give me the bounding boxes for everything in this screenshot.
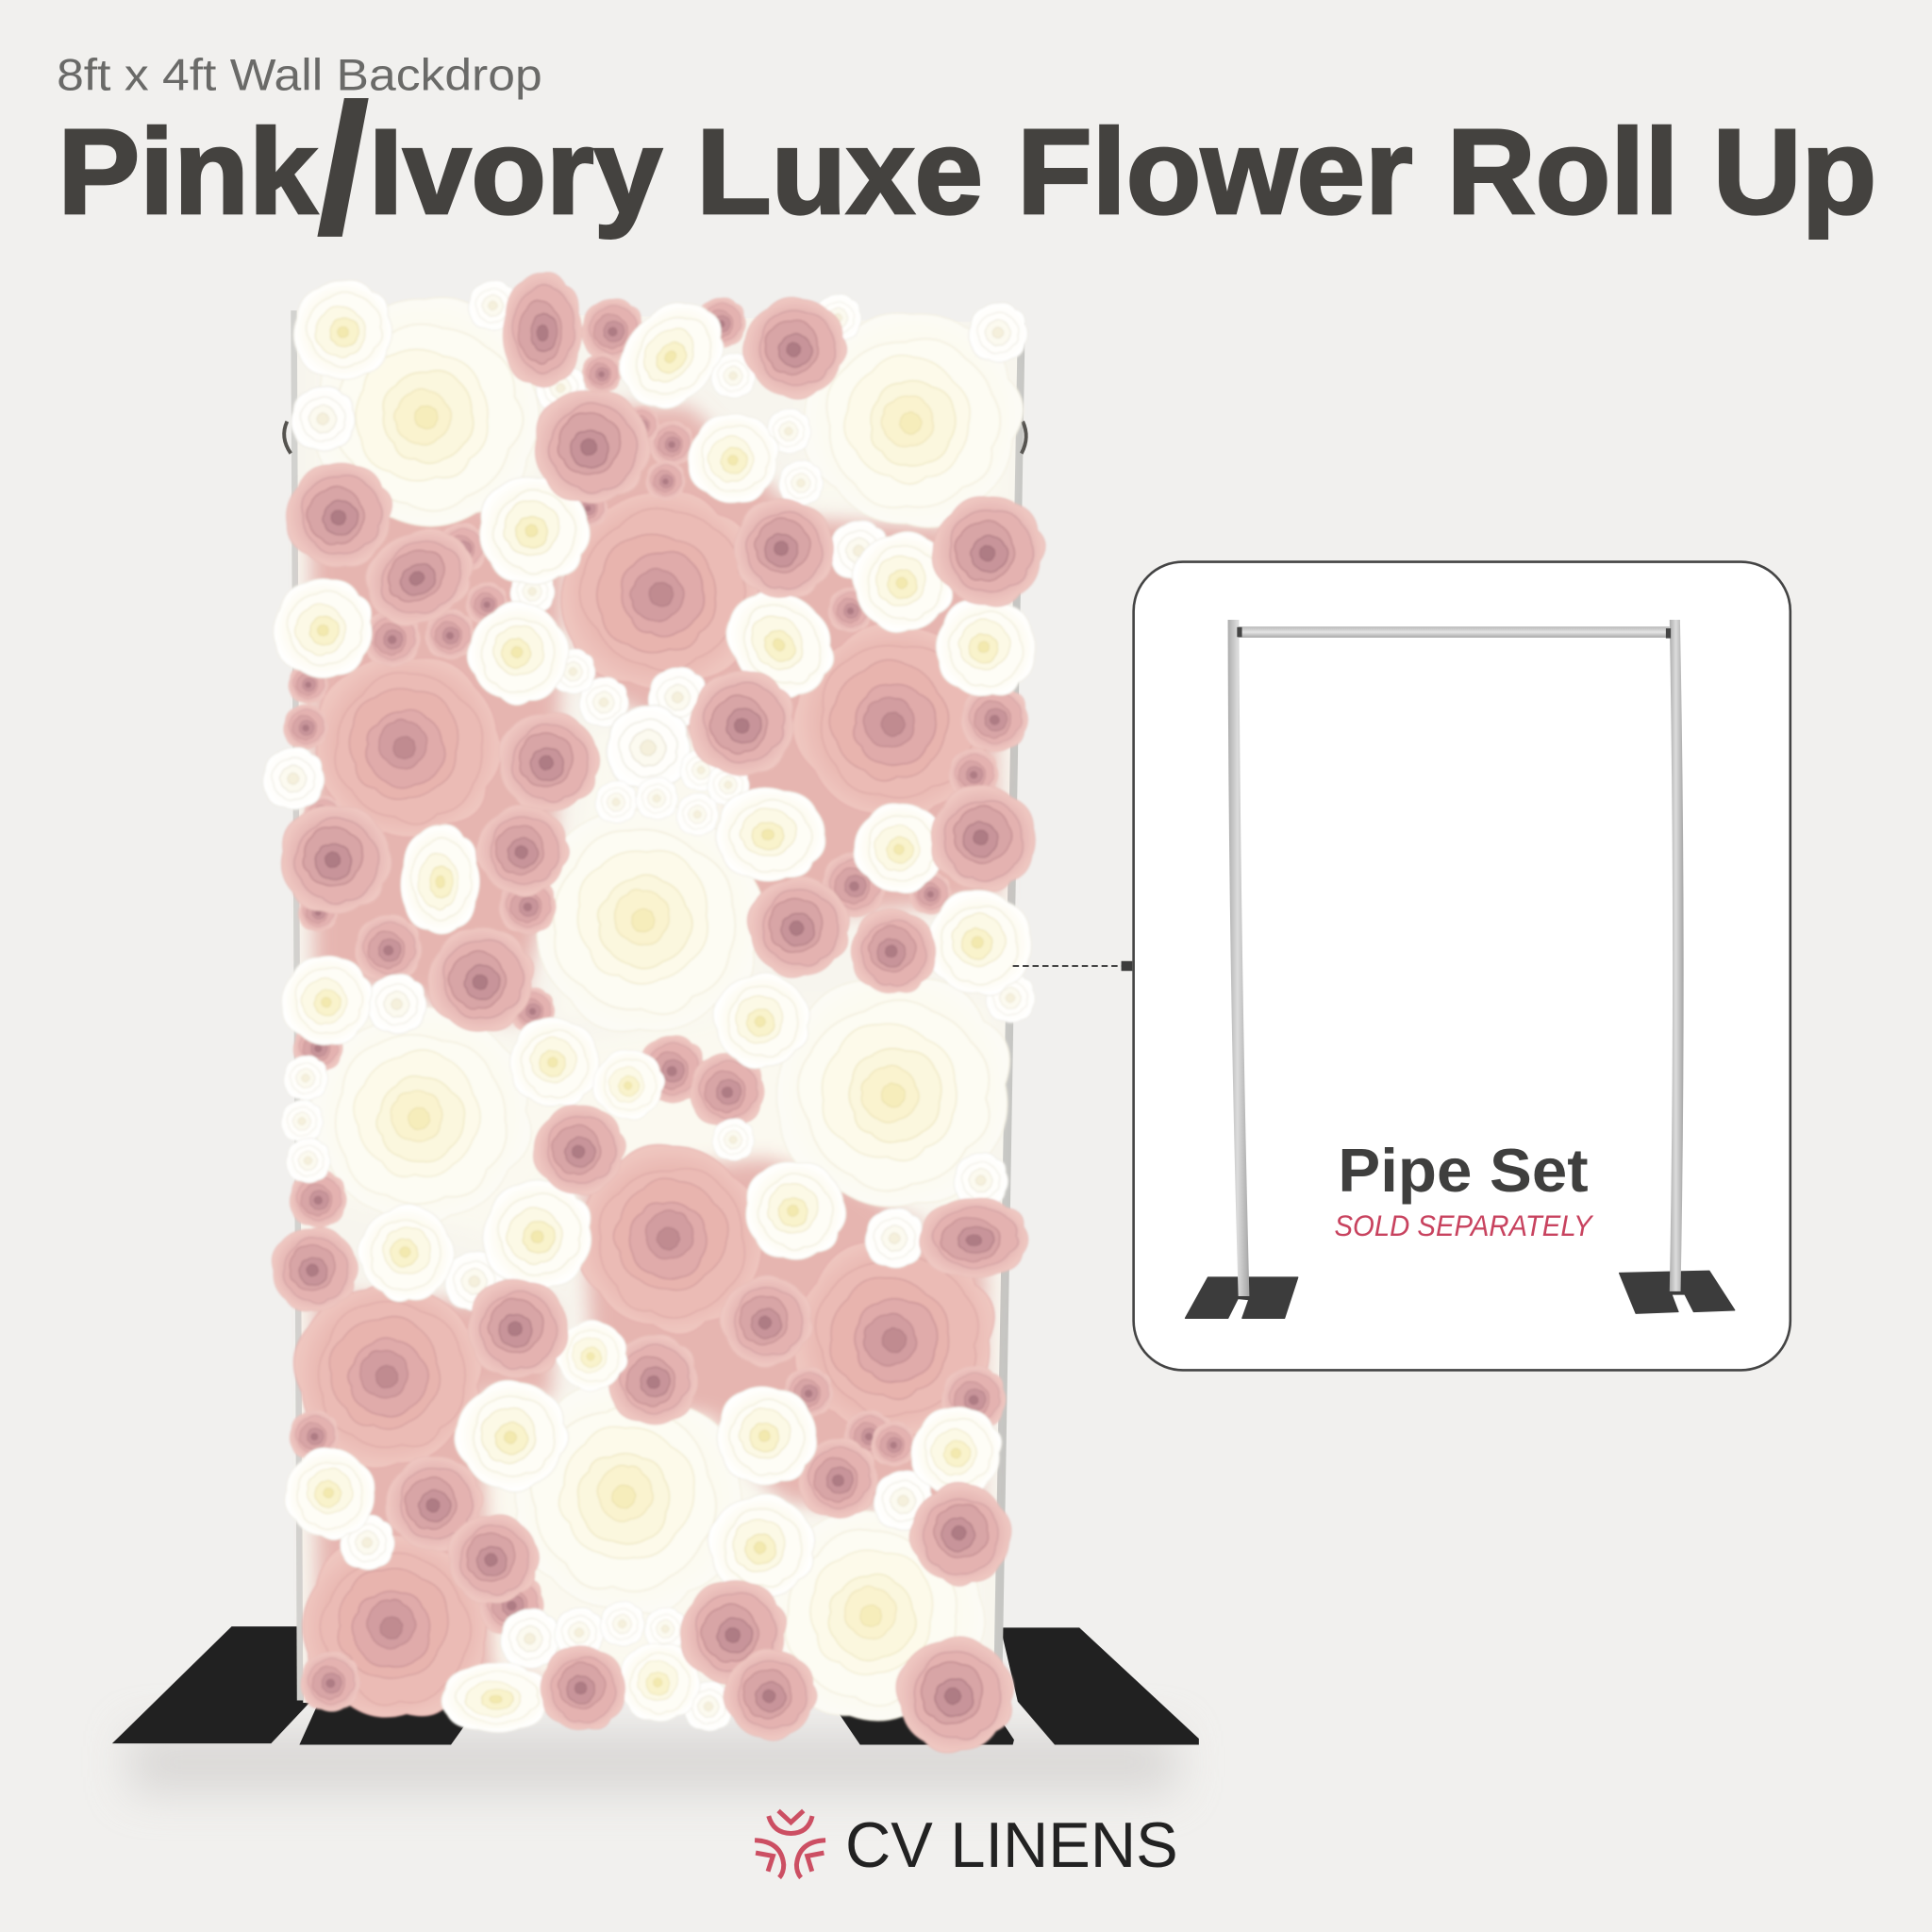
logo wordmark: CV LINENS <box>845 1810 1178 1881</box>
giant ivory roses <box>252 259 1076 1757</box>
panel: pipe set <box>1134 562 1790 1370</box>
backdrop frame <box>284 310 1026 1715</box>
small white roses <box>262 280 1035 1731</box>
medium ivory roses <box>266 277 1049 1733</box>
pink fill behind blooms <box>310 407 998 1688</box>
title: Ivory Luxe Flower Roll Up <box>369 105 1876 240</box>
logo <box>755 1810 1178 1881</box>
pipe set heading: Pipe Set <box>1338 1136 1589 1205</box>
medium pink roses <box>258 268 1071 1779</box>
giant pink roses <box>252 476 1051 1750</box>
connector line <box>1013 961 1132 971</box>
logo mark <box>755 1810 825 1877</box>
small pink roses <box>283 295 1032 1713</box>
floor shadow <box>129 1731 1176 1792</box>
pipe frame <box>1185 620 1735 1318</box>
sold separately note: SOLD SEPARATELY <box>1335 1209 1593 1242</box>
title: / <box>317 67 369 271</box>
ivory fill behind blooms <box>314 333 1004 1675</box>
title: Pink <box>58 105 313 240</box>
subtitle: 8ft x 4ft Wall Backdrop <box>57 49 542 99</box>
base plates <box>112 1626 1199 1744</box>
flower wall <box>252 259 1076 1779</box>
